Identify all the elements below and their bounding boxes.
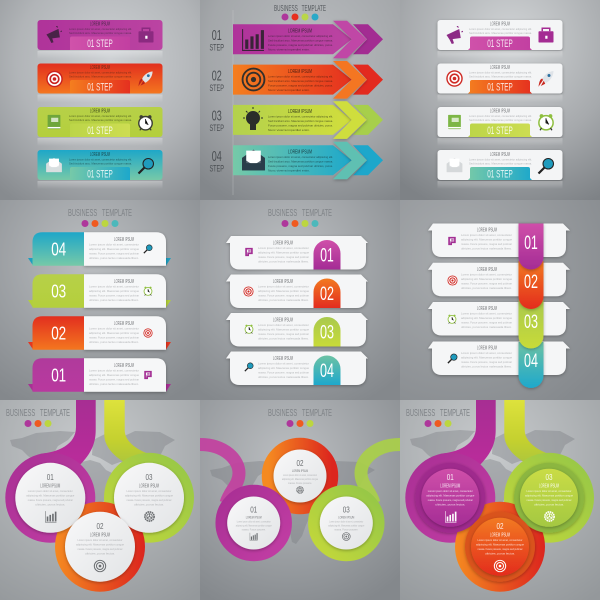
arrow row 03: Sed tincidunt arcu. Maecenas porttitor congue massa. xyxy=(268,119,333,123)
card 02: ultricies, purus lectus malesuada libero. xyxy=(89,340,139,344)
arrow row 02: Fusce posuere, magna sed pulvinar ultricies, purus. xyxy=(268,83,333,87)
disc 02: 02 xyxy=(296,458,304,468)
card row 03: Lorem ipsum dolor sit amet, consectetur xyxy=(461,312,512,316)
arrow row 04 xyxy=(209,142,383,179)
card 02 xyxy=(28,316,171,350)
banner: magenta tab: 01 STEP xyxy=(487,38,513,50)
colored disc 03 xyxy=(514,463,584,533)
banner: magenta step: LOREM IPSUM xyxy=(90,22,110,28)
arrow row 04: Sed tincidunt arcu. Maecenas porttitor congue massa. xyxy=(268,160,333,164)
panel: linked rings xyxy=(200,400,400,600)
disc 01: ultricies, purus lectus. xyxy=(35,502,66,506)
banner: orange tab: Lorem ipsum dolor sit amet, consectetur adipiscing elit. xyxy=(469,70,532,74)
disc 02: massa. Fusce posuere, magna sed pulvinar xyxy=(78,547,123,551)
colored disc 02: 02 xyxy=(496,521,504,531)
ring 01 with strip xyxy=(5,400,96,543)
card 01: Lorem ipsum dolor sit amet, consectetur xyxy=(89,368,139,372)
disc 01 xyxy=(227,496,280,550)
banner: green tab: Lorem ipsum dolor sit amet, consectetur adipiscing elit. xyxy=(469,114,532,118)
arrow row 01 xyxy=(209,21,383,58)
disc 03 xyxy=(114,463,184,533)
colored disc 03: ultricies, purus lectus. xyxy=(534,502,564,506)
banner: green step: Sed tincidunt arcu. Maecenas porttitor congue massa. xyxy=(69,118,132,122)
card 01: ultricies, purus lectus malesuada libero. xyxy=(89,382,139,386)
disc 02: Lorem ipsum dolor sit amet, consectetur xyxy=(78,538,123,542)
card row 01: massa. Fusce posuere, magna sed pulvinar xyxy=(461,242,512,246)
card 04: adipiscing elit. Maecenas porttitor congue xyxy=(89,247,140,251)
arrow row 03: Fusce posuere, magna sed pulvinar ultricies, purus. xyxy=(268,124,333,128)
card 03: 03 xyxy=(51,282,66,302)
colored disc 02: adipiscing elit. Maecenas porttitor congue xyxy=(476,542,524,546)
arrow row 03: Lorem ipsum dolor sit amet, consectetur adipiscing elit. xyxy=(268,115,333,119)
banner: orange step: Lorem ipsum dolor sit amet, consectetur adipiscing elit. xyxy=(69,70,132,74)
legend dots xyxy=(24,420,52,427)
arrow row 04: Lorem ipsum dolor sit amet, consectetur adipiscing elit. xyxy=(268,155,333,159)
arrow row 02: Lorem ipsum dolor sit amet, consectetur adipiscing elit. xyxy=(268,74,333,78)
title: BUSINESS TEMPLATE xyxy=(6,407,70,419)
banner: green step: 01 STEP xyxy=(87,125,113,137)
card 02: LOREM IPSUM xyxy=(273,279,293,285)
disc 03: 03 xyxy=(343,504,350,514)
colored disc 02: ultricies, purus lectus. xyxy=(485,552,515,556)
banner: green step xyxy=(38,107,162,146)
arrow row 02: 02 xyxy=(212,68,222,84)
card 01: 01 xyxy=(320,246,334,267)
disc 02: LOREM IPSUM xyxy=(292,468,308,473)
colored disc 03: massa. Fusce posuere, magna sed pulvinar xyxy=(526,498,572,502)
panel: arrow steps xyxy=(200,0,400,200)
disc 01: massa. Fusce posuere, magna sed pulvinar xyxy=(28,498,73,502)
banner: orange tab: LOREM IPSUM xyxy=(490,65,510,71)
banner: teal step: LOREM IPSUM xyxy=(90,152,110,158)
colored disc 01: Lorem ipsum dolor sit amet, consectetur xyxy=(428,489,473,493)
card row 01: ultricies, purus lectus malesuada libero. xyxy=(461,246,512,250)
card 01: adipiscing elit. Maecenas porttitor congue xyxy=(89,373,140,377)
arrow row 03: Nunc viverra imperdiet enim. xyxy=(268,128,310,132)
ring 01 with strip xyxy=(200,444,286,555)
card 01: Lorem ipsum dolor sit amet, consectetur xyxy=(258,246,309,250)
card 03 xyxy=(226,313,368,346)
ring 01 with strip xyxy=(405,400,496,543)
disc 01: LOREM IPSUM xyxy=(40,484,60,490)
card 03 xyxy=(28,274,171,308)
card 04: massa. Fusce posuere, magna sed pulvinar xyxy=(258,370,309,374)
arrow row 03: STEP xyxy=(209,123,224,134)
banner: orange tab: 01 STEP xyxy=(487,82,513,94)
card row 02 xyxy=(428,263,570,296)
disc 03: adipiscing elit. Maecenas porttitor congue xyxy=(125,494,173,498)
banner: magenta tab: Lorem ipsum dolor sit amet, consectetur adipiscing elit. xyxy=(469,27,532,31)
card row 03 xyxy=(428,302,570,336)
card 01 xyxy=(226,236,368,270)
legend dots xyxy=(82,220,118,227)
disc 02: adipiscing elit. Maecenas porttitor congue xyxy=(76,542,124,546)
ring 02 xyxy=(455,502,545,592)
card 02: Lorem ipsum dolor sit amet, consectetur xyxy=(258,284,309,288)
card 03: 03 xyxy=(320,323,334,344)
arrow row 01: Lorem ipsum dolor sit amet, consectetur adipiscing elit. xyxy=(268,34,333,38)
disc 01 xyxy=(15,463,85,533)
arrow row 01: Sed tincidunt arcu. Maecenas porttitor congue massa. xyxy=(268,38,333,42)
card 04 xyxy=(226,352,368,385)
title: BUSINESS TEMPLATE xyxy=(68,207,132,219)
banner: magenta step: Lorem ipsum dolor sit amet, consectetur adipiscing elit. xyxy=(69,27,132,31)
disc 03: massa. Fusce posuere. xyxy=(334,528,359,532)
colored disc 03: adipiscing elit. Maecenas porttitor congue xyxy=(525,494,573,498)
card 03: adipiscing elit. Maecenas porttitor congue xyxy=(89,289,140,293)
banner: teal step: Sed tincidunt arcu. Maecenas porttitor congue massa. xyxy=(69,162,132,166)
legend dots xyxy=(282,220,318,227)
card row 01 xyxy=(428,224,570,257)
vertical ribbon 02: 02 xyxy=(524,272,538,293)
card 04: Lorem ipsum dolor sit amet, consectetur xyxy=(89,242,139,246)
vertical ribbon 01: 01 xyxy=(524,233,538,254)
disc 01: adipiscing elit. Maecenas porttitor congue xyxy=(236,524,272,528)
disc 03: 03 xyxy=(146,472,153,482)
card 03: LOREM IPSUM xyxy=(273,318,293,324)
legend dots xyxy=(286,420,314,427)
colored disc 01: massa. Fusce posuere, magna sed pulvinar xyxy=(428,498,473,502)
card 01: massa. Fusce posuere, magna sed pulvinar xyxy=(258,255,309,259)
ring 03 with strip xyxy=(104,400,194,543)
colored disc 03: Lorem ipsum dolor sit amet, consectetur xyxy=(526,489,572,493)
card 04: LOREM IPSUM xyxy=(273,356,293,362)
colored disc 01: ultricies, purus lectus. xyxy=(435,502,466,506)
colored disc 02 xyxy=(465,512,535,582)
disc 03: LOREM IPSUM xyxy=(338,514,354,520)
vertical ribbon 03: 03 xyxy=(524,312,538,333)
panel: numbered cards right tabs xyxy=(200,200,400,400)
card row 03: massa. Fusce posuere, magna sed pulvinar xyxy=(461,320,512,324)
banner: orange step: LOREM IPSUM xyxy=(90,65,110,71)
card 02: massa. Fusce posuere, magna sed pulvinar xyxy=(89,336,139,340)
banner: green tab: Sed tincidunt arcu. Maecenas porttitor congue massa. xyxy=(469,118,532,122)
ring 02 xyxy=(268,444,332,508)
disc 02: 02 xyxy=(96,521,104,531)
arrow row 02: LOREM IPSUM xyxy=(288,69,312,75)
card 01: adipiscing elit. Maecenas porttitor congue xyxy=(258,250,310,254)
disc 03: Lorem ipsum dolor sit amet, consectetur xyxy=(126,489,172,493)
card row 04 xyxy=(428,342,570,375)
banner: orange step: Sed tincidunt arcu. Maecenas porttitor congue massa. xyxy=(69,74,132,78)
banner: orange step xyxy=(38,64,162,102)
banner: teal step: Lorem ipsum dolor sit amet, consectetur adipiscing elit. xyxy=(69,158,132,162)
disc 03: LOREM IPSUM xyxy=(139,484,159,490)
banner: magenta step: Sed tincidunt arcu. Maecenas porttitor congue massa. xyxy=(69,31,132,35)
title: BUSINESS TEMPLATE xyxy=(268,407,332,419)
arrow row 04: STEP xyxy=(209,164,224,174)
panel: white step banners xyxy=(400,0,600,200)
panel: circles with colored discs xyxy=(400,400,600,600)
card row 03: ultricies, purus lectus malesuada libero. xyxy=(461,325,512,329)
vertical ribbon 04 xyxy=(518,342,544,388)
card row 02: adipiscing elit. Maecenas porttitor congue xyxy=(461,277,513,281)
banner: magenta step xyxy=(38,20,162,59)
card 02: 02 xyxy=(320,284,334,305)
banner: green tab: LOREM IPSUM xyxy=(490,108,510,114)
card 03: ultricies, purus lectus malesuada libero. xyxy=(258,336,309,340)
arrow row 04: 04 xyxy=(212,149,222,165)
card row 04: massa. Fusce posuere, magna sed pulvinar xyxy=(461,360,512,364)
card row 01: LOREM IPSUM xyxy=(477,228,497,234)
card 01: LOREM IPSUM xyxy=(114,363,134,369)
arrow row 03: LOREM IPSUM xyxy=(288,109,312,115)
card 02: ultricies, purus lectus malesuada libero. xyxy=(258,298,309,302)
card 01: 01 xyxy=(51,366,66,386)
card 02: adipiscing elit. Maecenas porttitor congue xyxy=(89,331,140,335)
card 02: massa. Fusce posuere, magna sed pulvinar xyxy=(258,294,309,298)
card 04: LOREM IPSUM xyxy=(114,237,134,243)
arrow row 04: LOREM IPSUM xyxy=(288,150,312,156)
card row 04: Lorem ipsum dolor sit amet, consectetur xyxy=(461,351,512,355)
card 03: adipiscing elit. Maecenas porttitor congue xyxy=(258,328,310,332)
card 03: LOREM IPSUM xyxy=(114,279,134,285)
colored disc 01: adipiscing elit. Maecenas porttitor congue xyxy=(426,494,475,498)
card row 04: ultricies, purus lectus malesuada libero. xyxy=(461,364,512,368)
banner: teal step: 01 STEP xyxy=(87,168,113,180)
disc 02: adipiscing elit. Maecenas porttitor congue xyxy=(282,477,318,481)
title: BUSINESS TEMPLATE xyxy=(406,407,470,419)
disc 03 xyxy=(320,496,373,550)
legend dots xyxy=(282,14,318,20)
banner: teal step xyxy=(38,150,162,189)
disc 02: Lorem ipsum dolor sit amet, consectetur xyxy=(283,473,317,477)
card 03: ultricies, purus lectus malesuada libero. xyxy=(89,298,139,302)
card row 02: massa. Fusce posuere, magna sed pulvinar xyxy=(461,282,512,286)
banner: magenta tab: LOREM IPSUM xyxy=(490,22,510,28)
banner: teal tab xyxy=(438,150,562,189)
disc 01: adipiscing elit. Maecenas porttitor congue xyxy=(26,494,75,498)
card 03: massa. Fusce posuere, magna sed pulvinar xyxy=(89,294,139,298)
disc 03: adipiscing elit. Maecenas porttitor congue xyxy=(328,524,365,528)
colored disc 01: 01 xyxy=(447,472,454,482)
arrow row 01: Nunc viverra imperdiet enim. xyxy=(268,48,310,52)
disc 01: Lorem ipsum dolor sit amet, consectetur xyxy=(28,489,73,493)
arrow row 02: Sed tincidunt arcu. Maecenas porttitor congue massa. xyxy=(268,79,333,83)
world map xyxy=(10,431,176,514)
card 04: adipiscing elit. Maecenas porttitor congue xyxy=(258,366,310,370)
card 02: 02 xyxy=(51,324,66,344)
disc 01: 01 xyxy=(250,504,257,514)
banner: magenta tab xyxy=(438,20,562,59)
arrow row 01: Fusce posuere, magna sed pulvinar ultricies, purus. xyxy=(268,43,333,47)
card 03: massa. Fusce posuere, magna sed pulvinar xyxy=(258,332,309,336)
arrow row 04: Nunc viverra imperdiet enim. xyxy=(268,168,310,172)
card 04: ultricies, purus lectus malesuada libero. xyxy=(89,256,139,260)
card 04 xyxy=(28,232,171,266)
panel: numbered cards left tabs xyxy=(0,200,200,400)
card 02: LOREM IPSUM xyxy=(114,321,134,327)
world map xyxy=(210,461,376,544)
card 04: Lorem ipsum dolor sit amet, consectetur xyxy=(258,362,309,366)
arrow row 02 xyxy=(209,61,383,99)
card 02: adipiscing elit. Maecenas porttitor congue xyxy=(258,289,310,293)
panel: vertical ribbon cards xyxy=(400,200,600,400)
disc 01: 01 xyxy=(47,472,54,482)
card 02: Lorem ipsum dolor sit amet, consectetur xyxy=(89,326,139,330)
colored disc 02: LOREM IPSUM xyxy=(490,532,510,538)
disc 02: LOREM IPSUM xyxy=(90,532,110,538)
disc 02: massa. Fusce posuere. xyxy=(288,481,312,485)
card row 01: adipiscing elit. Maecenas porttitor congue xyxy=(461,238,513,242)
card 04: ultricies, purus lectus malesuada libero. xyxy=(258,375,309,379)
card row 01: Lorem ipsum dolor sit amet, consectetur xyxy=(461,233,512,237)
banner: teal tab: Lorem ipsum dolor sit amet, consectetur adipiscing elit. xyxy=(469,158,532,162)
banner: magenta tab: Sed tincidunt arcu. Maecenas porttitor congue massa. xyxy=(469,31,532,35)
banner: orange tab xyxy=(438,64,562,102)
card row 04: LOREM IPSUM xyxy=(477,346,497,352)
card 03: Lorem ipsum dolor sit amet, consectetur xyxy=(258,323,309,327)
card row 02: Lorem ipsum dolor sit amet, consectetur xyxy=(461,272,512,276)
disc 01: LOREM IPSUM xyxy=(246,514,262,520)
card 01: massa. Fusce posuere, magna sed pulvinar xyxy=(89,378,139,382)
disc 03: ultricies, purus lectus. xyxy=(134,502,164,506)
colored disc 02: Lorem ipsum dolor sit amet, consectetur xyxy=(478,538,523,542)
card 02 xyxy=(226,274,368,308)
banner: green step: LOREM IPSUM xyxy=(90,108,110,114)
banner: green tab: 01 STEP xyxy=(487,125,513,137)
vertical ribbon 04: 04 xyxy=(524,351,538,372)
icon: light bulb xyxy=(243,107,263,130)
card 01 xyxy=(28,358,171,392)
banner: teal tab: 01 STEP xyxy=(487,168,513,180)
card 01: ultricies, purus lectus malesuada libero. xyxy=(258,260,309,264)
banner: green step: Lorem ipsum dolor sit amet, consectetur adipiscing elit. xyxy=(69,114,132,118)
panel: colored step banners xyxy=(0,0,200,200)
card 04: massa. Fusce posuere, magna sed pulvinar xyxy=(89,252,139,256)
arrow row 04: Fusce posuere, magna sed pulvinar ultricies, purus. xyxy=(268,164,333,168)
card row 03: LOREM IPSUM xyxy=(477,306,497,312)
arrow row 03: 03 xyxy=(212,109,222,125)
colored disc 02: massa. Fusce posuere, magna sed pulvinar xyxy=(478,547,523,551)
card row 03: adipiscing elit. Maecenas porttitor congue xyxy=(461,316,513,320)
banner: green tab xyxy=(438,107,562,146)
disc 01: massa. Fusce posuere. xyxy=(242,528,266,532)
title: BUSINESS TEMPLATE xyxy=(274,3,326,13)
banner: teal tab: Sed tincidunt arcu. Maecenas porttitor congue massa. xyxy=(469,162,532,166)
title: BUSINESS TEMPLATE xyxy=(268,207,332,219)
banner: teal tab: LOREM IPSUM xyxy=(490,152,510,158)
disc 02 xyxy=(65,512,135,582)
colored disc 03: LOREM IPSUM xyxy=(539,484,559,490)
legend dots xyxy=(424,420,452,427)
card row 02: LOREM IPSUM xyxy=(477,267,497,273)
disc 01: Lorem ipsum dolor sit amet, consectetur xyxy=(237,520,271,524)
disc 02: ultricies, purus lectus. xyxy=(85,552,115,556)
card 01: LOREM IPSUM xyxy=(273,240,293,246)
colored disc 01: LOREM IPSUM xyxy=(440,484,460,490)
arrow row 02: Nunc viverra imperdiet enim. xyxy=(268,88,310,92)
banner: orange step: 01 STEP xyxy=(87,82,113,94)
ring 03 with strip xyxy=(504,400,594,543)
colored disc 01 xyxy=(415,463,485,533)
arrow row 01: LOREM IPSUM xyxy=(288,28,312,34)
arrow row 01: STEP xyxy=(209,42,224,54)
disc 02 xyxy=(274,450,326,502)
world map xyxy=(410,430,576,513)
arrow row 01: 01 xyxy=(212,28,222,44)
arrow row 02: STEP xyxy=(209,83,224,94)
panel: circles with white discs xyxy=(0,400,200,600)
disc 03: massa. Fusce posuere, magna sed pulvinar xyxy=(126,498,172,502)
disc 03: Lorem ipsum dolor sit amet, consectetur xyxy=(329,520,363,524)
card row 02: ultricies, purus lectus malesuada libero. xyxy=(461,286,512,290)
arrow row 03 xyxy=(209,101,383,139)
card 04: 04 xyxy=(51,240,66,260)
card row 04: adipiscing elit. Maecenas porttitor congue xyxy=(461,356,513,360)
banner: orange tab: Sed tincidunt arcu. Maecenas porttitor congue massa. xyxy=(469,74,532,78)
banner: magenta step: 01 STEP xyxy=(87,38,113,50)
ring 03 with strip xyxy=(314,444,400,555)
colored disc 03: 03 xyxy=(546,472,553,482)
vertical ribbon 03 xyxy=(518,300,544,348)
ring 02 xyxy=(55,502,145,592)
card 04: 04 xyxy=(320,361,334,382)
vertical ribbon 02 xyxy=(518,261,544,309)
card 03: Lorem ipsum dolor sit amet, consectetur xyxy=(89,284,139,288)
vertical ribbon 01 xyxy=(518,224,544,270)
